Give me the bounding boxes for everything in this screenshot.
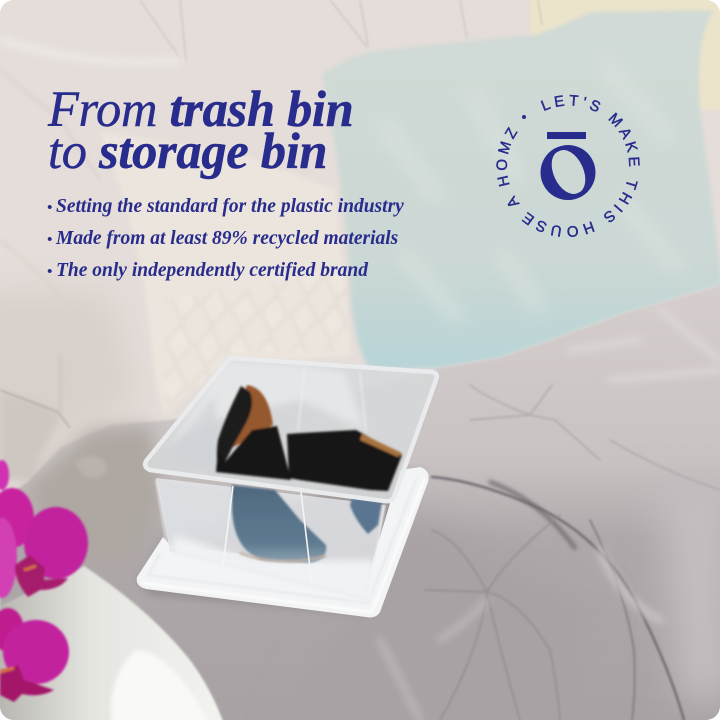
duvet pinch near pillow: [75, 456, 106, 478]
logo mark: macron bar: [547, 132, 586, 139]
bullet: certified brand: The only independently certified brand: [56, 260, 368, 281]
orchid one: [0, 460, 88, 598]
circular slogan text: LET'S MAKE THIS HOUSE A HOMZ: [496, 94, 640, 237]
bullet: recycled materials: Made from at least 89% recycled materials: [56, 228, 398, 249]
left pillow: [0, 290, 140, 482]
clear plastic bin: [144, 357, 438, 601]
storage bin lid: [137, 467, 429, 617]
title: [48, 81, 353, 180]
turquoise furry pillow: [322, 10, 720, 370]
orchid flowers: [0, 460, 88, 702]
duvet creases: [380, 310, 720, 720]
ring dot: [522, 115, 526, 119]
pillow fur texture: [380, 60, 680, 320]
shoe seen through front wall: [232, 485, 382, 563]
cream diamond-pattern cushion: [100, 132, 352, 415]
orchid two: [0, 608, 69, 702]
bin front wall: [156, 478, 385, 601]
bullet: plastic industry standard: Setting the standard for the plastic industry: [56, 196, 404, 217]
bin interior back wall: [144, 357, 438, 502]
bullet: recycled materials: •: [47, 232, 52, 248]
bin rim: [145, 358, 437, 501]
white sofa arm: [0, 566, 224, 720]
bullet: plastic industry standard: •: [47, 200, 52, 216]
title: to storage bin: [48, 123, 327, 179]
title: From trash bin: [48, 81, 353, 137]
grey duvet: [0, 285, 720, 720]
bullet list: [47, 196, 404, 281]
black shoes: [216, 385, 402, 491]
bullet: certified brand: •: [47, 264, 52, 280]
logo mark: letter o: [541, 145, 596, 200]
